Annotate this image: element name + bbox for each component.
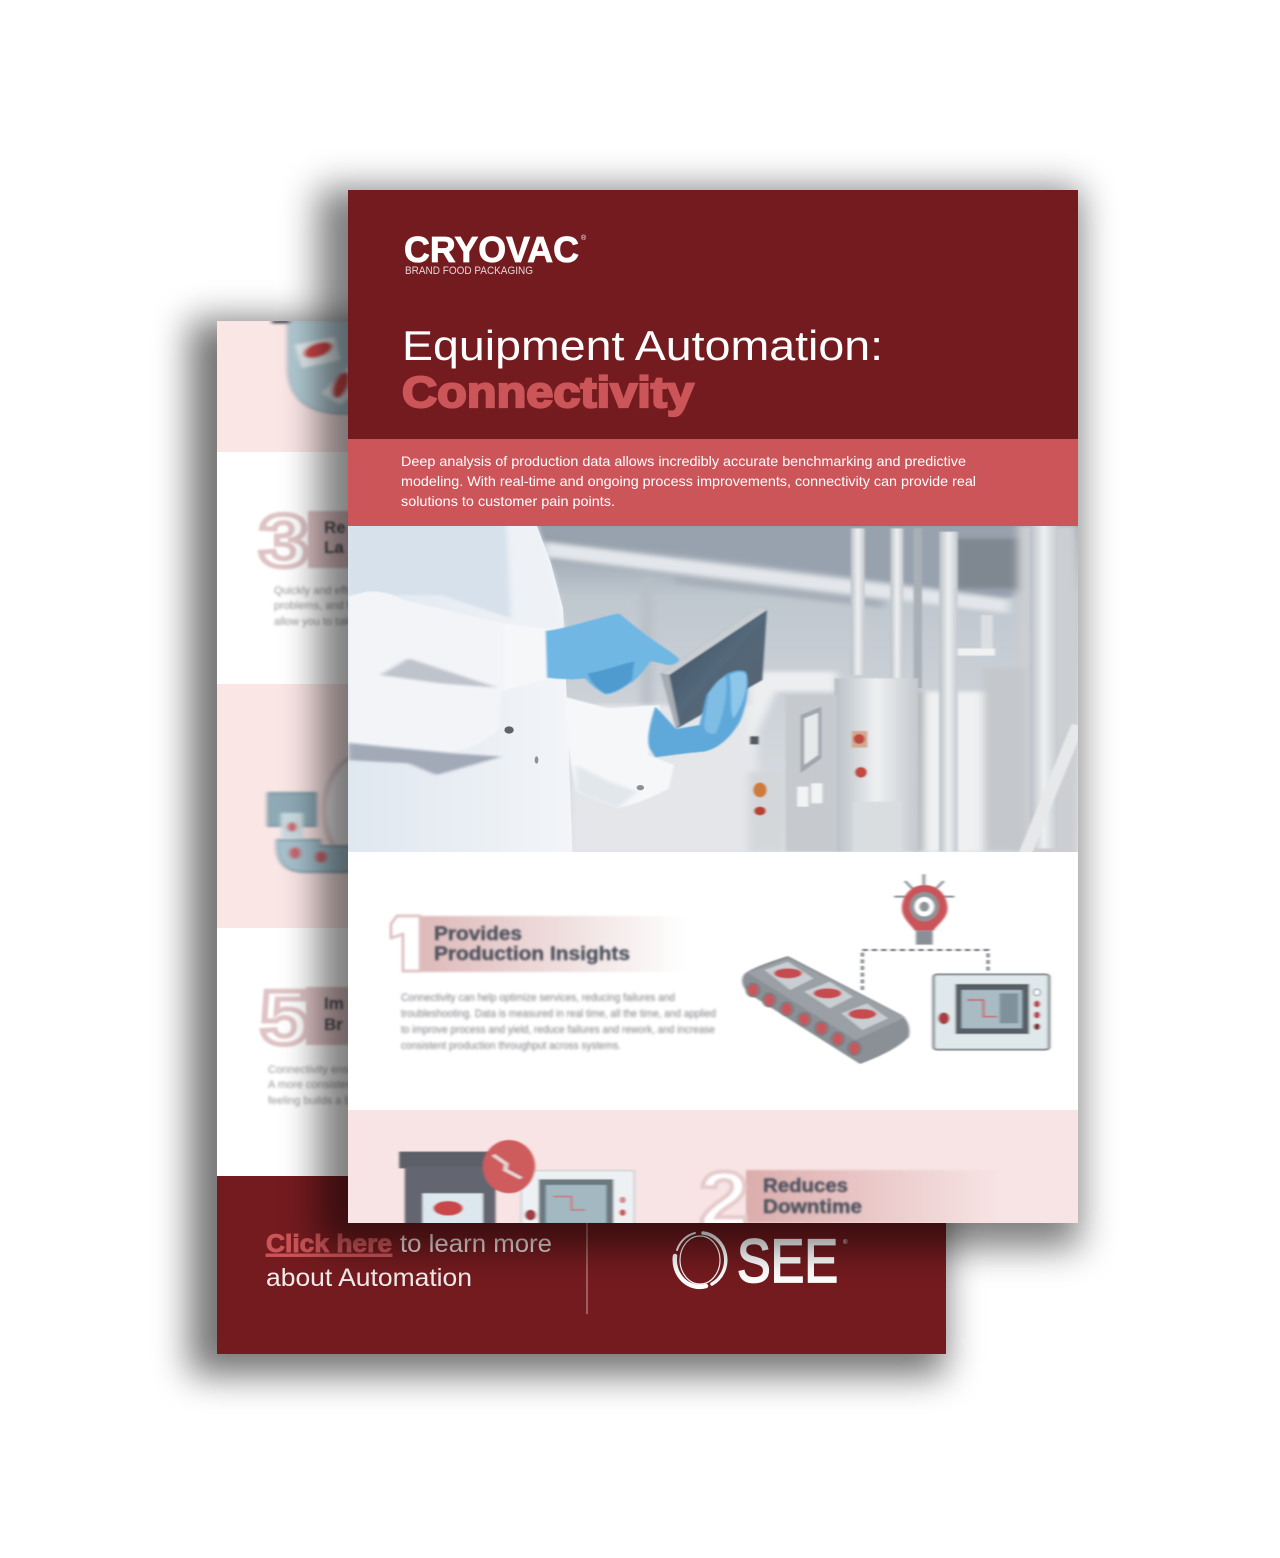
text: intro line 1: Deep analysis of production data allows incredibly accurate benchmarking and predictive xyxy=(401,453,966,469)
panel: item 1 xyxy=(391,875,1049,1064)
number 3 heading: 3 xyxy=(259,499,309,582)
logo: Cryovac: CRYOVAC xyxy=(404,229,579,270)
text block: item 1 body: Connectivity can help optimize services, reducing failures and xyxy=(401,992,675,1004)
photo: technician with tablet in a factory xyxy=(348,525,1078,855)
heading: reduces downtime xyxy=(763,1176,862,1218)
logo wordmark: SEE xyxy=(737,1227,838,1295)
number 3 heading: Re xyxy=(324,518,346,537)
panel: back page xyxy=(217,320,946,1354)
photo pipes xyxy=(851,525,1078,853)
text block: item 3 body: Quickly and effectively xyxy=(274,585,384,597)
icon: control panel xyxy=(934,974,1049,1050)
text block: item 3 body: problems, and fix them xyxy=(274,600,385,612)
panel: header xyxy=(348,190,1078,439)
text block: item 5 body: feeling builds a bond xyxy=(268,1095,369,1107)
registered mark: ® xyxy=(581,234,587,242)
number 3 heading: La xyxy=(324,538,344,557)
footer divider xyxy=(586,1223,588,1314)
text block: item 1 body: consistent production throughput across systems. xyxy=(401,1040,621,1052)
registered mark: ® xyxy=(843,1239,848,1246)
photo control cabinet xyxy=(750,678,918,852)
number 5 heading: 5 xyxy=(260,976,309,1061)
heading: reduces downtime: Downtime xyxy=(763,1197,862,1218)
heading: provides production insights: Production Insights xyxy=(434,944,630,965)
icon: control panel xyxy=(521,1171,634,1226)
panel: item 2 xyxy=(348,1110,1078,1243)
text block: item 3 body xyxy=(273,585,348,628)
text block: item 1 body xyxy=(401,992,716,1052)
title line 1: Equipment Automation: xyxy=(402,322,883,369)
title line 2: Connectivity xyxy=(402,368,695,417)
icon: conveyor belt xyxy=(742,956,909,1064)
photo tablet xyxy=(661,607,767,729)
text: to learn more: to learn more xyxy=(400,1230,552,1258)
panel: back page white band with item 5 xyxy=(217,928,348,1176)
heading: reduces downtime: Reduces xyxy=(763,1176,848,1197)
panel: front page xyxy=(348,190,1078,1243)
logo tagline: BRAND FOOD PACKAGING xyxy=(405,265,533,277)
text block: item 3 body: allow you to take action xyxy=(274,616,388,628)
logo ring xyxy=(675,1233,726,1287)
number 2 heading xyxy=(699,1155,1001,1243)
panel: back page pink band with conveyor icon xyxy=(217,684,348,928)
logo: SEE xyxy=(672,1231,848,1290)
photo background factory xyxy=(534,525,1078,855)
photo lab coat xyxy=(348,525,674,852)
call to action xyxy=(266,1234,551,1286)
panel: back page white band with item 3 xyxy=(217,452,348,684)
illustration: downtime machine and panel xyxy=(399,1140,634,1226)
panel: intro band xyxy=(348,439,1078,526)
number 2 heading: 2 xyxy=(699,1155,749,1243)
text: about automation: about Automation xyxy=(266,1264,472,1292)
link: click here: Click here xyxy=(266,1230,392,1258)
text block: item 5 body: Connectivity ensures xyxy=(268,1064,371,1076)
number 5 heading: Im xyxy=(324,994,344,1013)
text block: item 5 body xyxy=(267,1064,348,1108)
panel: back page footer xyxy=(217,1176,946,1354)
number 1 heading xyxy=(391,916,688,972)
icon: downtime alert badge xyxy=(483,1140,535,1193)
illustration: conveyor connected to bulb and control panel xyxy=(742,875,1049,1064)
text block: item 5 body: A more consistent xyxy=(268,1079,355,1091)
back page shadow xyxy=(190,320,945,1375)
text: intro line 2: modeling. With real-time and ongoing process improvements, connectivity can provide real xyxy=(401,473,976,489)
photo blue gloves xyxy=(546,613,748,757)
icon: light bulb with gear xyxy=(895,875,953,945)
icon: sealing machine xyxy=(399,1152,497,1225)
front page shadow xyxy=(318,188,1080,1248)
heading: provides production insights: Provides xyxy=(434,924,522,945)
dashed connector xyxy=(862,950,988,990)
number 3 heading xyxy=(257,510,348,570)
panel: back page pink band top xyxy=(217,321,348,452)
text: intro line 3: solutions to customer pain points. xyxy=(401,493,615,509)
icon: packaged meat shield xyxy=(272,320,360,414)
icon: conveyor loop xyxy=(264,757,348,874)
heading: provides production insights xyxy=(434,924,630,965)
text block: item 1 body: troubleshooting. Data is measured in real time, all the time, and applied xyxy=(401,1008,716,1020)
text block: item 1 body: to improve process and yield, reduce failures and rework, and increase xyxy=(401,1024,715,1036)
number 5 heading xyxy=(258,986,348,1048)
number 5 heading: Br xyxy=(324,1015,343,1034)
